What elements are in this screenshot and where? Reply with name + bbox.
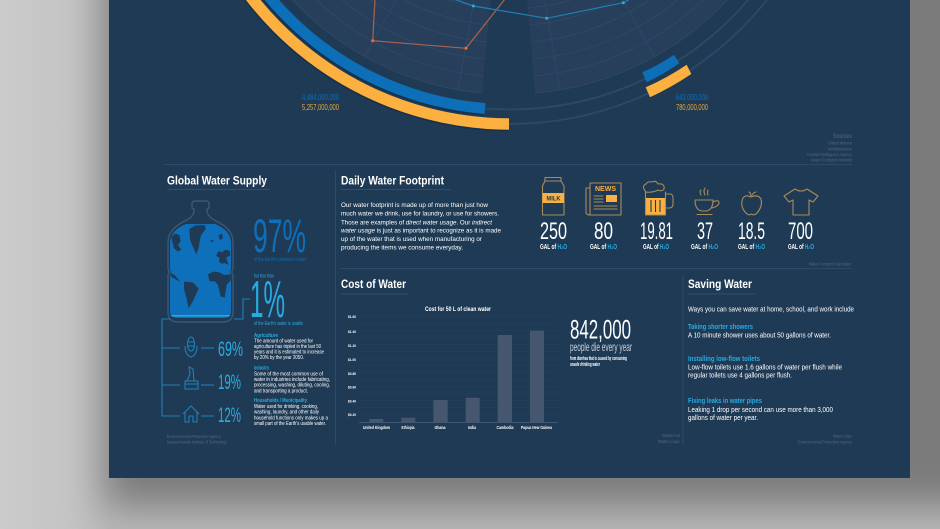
icon: apple [742,192,762,215]
stat: 19 percent: 19% [218,371,241,394]
heading: daily water footprint: Daily Water Footprint [341,176,444,188]
text: agriculture: agriculture has tripled in the last 50 [254,344,321,350]
sources top: United Nations [828,140,852,146]
text: households: small part of the Earth's usable water. [254,421,326,427]
yellow arc right [646,65,691,97]
tip: shorter showers: A 10 minute shower uses about 50 gallons of water. [688,332,831,340]
stat: 842,000 [570,314,632,368]
bar chart: $0.20 [348,412,357,417]
bar chart: United Kingdom [363,425,390,430]
icon: beer [644,181,673,215]
stat: 842,000: unsafe drinking water [570,362,600,368]
saving intro: Ways you can save water at home, school, and work include [688,306,854,314]
text: industry: Some of the most common use of [254,371,323,377]
radar chart [244,0,768,131]
tip: shorter showers: Taking shorter showers [688,324,753,331]
text: agriculture: by 20% by the year 2050. [254,355,304,361]
text: households [253,398,328,427]
icon: newspaper: NEWS [595,186,616,193]
number: beer: 19.81 [640,218,673,245]
footprint text: producing the items we consume everyday. [341,245,463,252]
bar chart: Cambodia [496,425,514,430]
bar chart: $0.60 [348,384,357,390]
icon: house [183,406,199,422]
yellow arc left [226,0,509,125]
icon: newspaper [586,183,621,215]
text: households: Households / Municipality [254,398,307,404]
sources: saving: Water Logic [833,434,852,440]
panel: cost of water [341,279,681,445]
sources top: Sources [833,133,853,140]
bar chart: Cost for 50 L of clean water [425,307,492,313]
number: apple: GAL of H₂O [738,242,765,251]
sources: supply: Massachusetts Institute of Technology [167,440,227,446]
footprint text [341,202,501,252]
icon: industry [185,367,198,389]
bar chart [348,307,558,430]
left arc values [302,93,339,112]
tip: fixing leaks: Leaking 1 drop per second can use more than 3,000 [688,407,833,414]
number: milk: GAL of H₂O [540,242,567,251]
radar grid [292,0,728,94]
orange data line [371,0,505,50]
sources top: Central Intelligence Agency [807,152,852,158]
bar chart: $1.00 [348,357,357,362]
text: agriculture: Agriculture [254,333,278,339]
connector lines [162,299,250,416]
text: agriculture: The amount of water used for [254,338,313,344]
left arc values: 5,257,000,000 [302,103,339,112]
sources: cost [658,433,681,445]
text: households: washing, laundry, and other daily [253,410,319,416]
sources: supply [167,434,227,446]
blue arc left [238,0,485,110]
number: apple: 18.5 [738,218,765,245]
number: milk [540,218,567,251]
bar chart: $1.20 [348,343,357,348]
icon: water bottle world map [168,201,233,322]
sources: saving: Environmental Protection Agency [798,440,852,446]
bar chart: $0.40 [348,398,357,404]
number: t-shirt [788,218,814,251]
tip: low-flow toilets: Installing low-flow toilets [688,356,760,363]
text: industry: Industry [254,366,269,372]
sources: saving [798,434,852,446]
footprint text: Those are examples of direct water usage. Our indirect [341,219,492,226]
source: calculator: Water Footprint Calculator [809,262,851,268]
panel: saving water [688,279,854,446]
blue arc right [642,55,679,82]
stat: 97 percent: of the Earth's covered in water [254,257,306,263]
number: beer [640,218,673,251]
tip: low-flow toilets [688,356,842,380]
text: industry: and transporting a product. [254,388,308,394]
number: t-shirt: 700 [788,218,813,245]
sources top: Water Footprint Network [811,158,852,164]
poster background [109,0,910,478]
text: industry: processing, washing, diluting, cooling, [254,383,330,389]
thin outer rings [485,0,768,125]
bar chart: Ghana [434,425,446,430]
bar chart: Papua New Guinea [521,425,552,430]
right arc values [676,93,708,112]
right arc values: 780,000,000 [676,103,708,112]
sources: cost: WaterAid [662,433,680,439]
icon: milk: MILK [546,196,561,202]
text: agriculture: years and it is estimated to increase [254,349,324,355]
text: industry [253,366,330,394]
stat: 97 percent: 97% [253,209,306,262]
heading: saving water: Saving Water [688,279,752,291]
stat: 69 percent: 69% [218,338,243,361]
blue data line [440,0,632,20]
radar sectors [546,13,560,86]
number: milk: 250 [540,218,567,245]
icon: coffee cup [695,188,719,214]
panel: daily water footprint [341,176,851,268]
tip: fixing leaks: Fixing leaks in water pipes [688,398,762,405]
text: agriculture [254,333,324,361]
number: news: 80 [594,218,613,245]
stat: 12 percent: 12% [218,404,241,427]
tip: low-flow toilets: Low-flow toilets use 1.6 gallons of water per flush while [688,364,842,372]
number: coffee: GAL of H₂O [691,242,718,251]
tip: low-flow toilets: regular toilets use 4 gallons per flush. [688,372,792,380]
number: apple [738,218,765,251]
icon: corn [185,337,197,357]
text: industry: water in industries include fabricating, [253,377,330,383]
bar chart: $0.80 [348,371,357,376]
stat: 842,000: 842,000 [570,314,631,344]
number: coffee: 37 [697,218,713,245]
left arc values: 4,484,000,000 [302,93,339,102]
panel: global water supply [162,176,330,446]
heading: global water supply: Global Water Supply [167,176,268,188]
bar chart: $1.60 [348,314,357,319]
dividers [165,164,852,445]
sources top [807,133,853,164]
bar chart: Ethiopia [402,425,415,430]
tip: fixing leaks [688,398,833,422]
bar chart: India [468,425,476,430]
sources: cost: Water Logic [658,439,681,445]
stat: 842,000: from diarrhea that is caused by consuming [570,356,627,362]
footprint text: water usage is just as important to recognize as it is made [341,228,501,235]
right arc values: 643,000,000 [676,93,708,102]
stat: 842,000: people die every year [570,340,632,354]
heading: cost of water: Cost of Water [341,279,406,291]
stat: 97 percent [253,209,306,263]
text: households: household functions only makes up a [254,415,328,421]
number: news: GAL of H₂O [590,242,617,251]
stat: 1 percent: of the Earth's water is usable [254,321,303,327]
number: coffee [691,218,718,251]
stat: 1 percent: but less than [254,274,274,280]
bar chart: $1.40 [348,329,357,334]
footprint text: Our water footprint is made up of more than just how [341,202,488,209]
sources top: Worldometers [828,146,852,152]
footprint text: up of the water that is used when manufacturing or [341,236,483,243]
sources: supply: Environmental Protection Agency [167,434,221,440]
number: t-shirt: GAL of H₂O [788,242,814,251]
icon: t-shirt [784,189,818,215]
number: news [590,218,617,251]
tip: shorter showers [688,324,831,340]
footprint text: much water we drink, use for laundry, or use for showers. [341,211,499,218]
tip: fixing leaks: gallons of water per year. [688,415,758,422]
number: beer: GAL of H₂O [643,242,669,251]
text: households: Water used for drinking, cooking, [254,404,318,410]
stat: 1 percent: 1% [250,271,285,329]
icon: milk [542,178,564,215]
